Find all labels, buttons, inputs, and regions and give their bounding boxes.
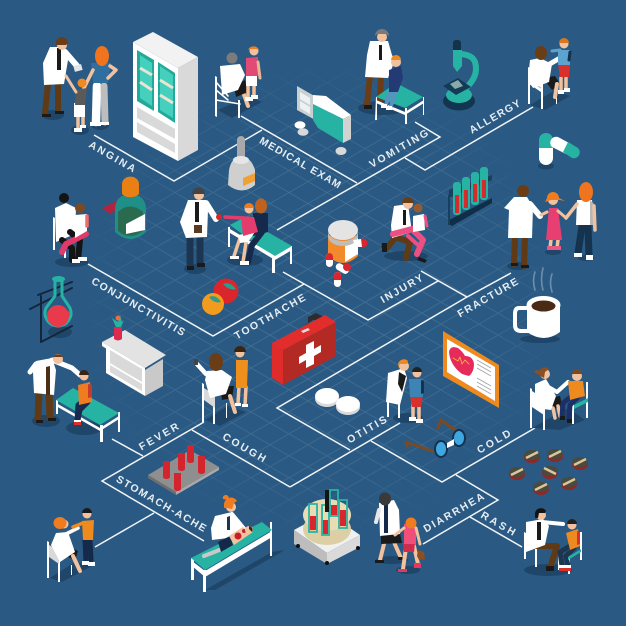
label: medical exam: MEDICAL EXAM xyxy=(257,135,343,191)
label: fever: FEVER xyxy=(137,421,181,453)
orange pill bottle with capsules xyxy=(326,220,368,287)
label: conjunctivitis: CONJUNCTIVITIS xyxy=(89,275,187,339)
tray with red tubes xyxy=(148,445,219,495)
people: stomach-ache nurse and patient on couch xyxy=(191,495,285,592)
capsules xyxy=(538,133,580,170)
people: injury doctor kneeling with girl xyxy=(382,197,428,263)
steam and coffee mug xyxy=(515,268,560,343)
first aid kit xyxy=(272,313,336,385)
people: cough woman on chair and girl xyxy=(194,346,250,426)
people: otitis doctor and child xyxy=(386,359,424,423)
label: injury: INJURY xyxy=(379,272,425,306)
rash plates xyxy=(509,449,588,495)
label: allergy: ALLERGY xyxy=(467,98,523,136)
white drawer cabinet with flowers xyxy=(102,315,166,396)
flowchart connector lines xyxy=(88,107,535,547)
label: toothache: TOOTHACHE xyxy=(232,292,308,342)
people: toothache doctor, mother and girl on bench xyxy=(180,188,292,274)
label: cold: COLD xyxy=(475,427,513,456)
tablets blister box xyxy=(294,86,351,155)
people: fracture doctor, girl and mother xyxy=(504,182,595,270)
lab flask on stand xyxy=(30,276,72,342)
test tubes in rack xyxy=(449,167,492,226)
label: diarrhea: DIARRHEA xyxy=(422,491,487,535)
people: cold woman and boy on chairs xyxy=(530,367,588,430)
people: stomach-ache nurse on chair and boy xyxy=(47,508,95,582)
people: conjunctivitis doctor holding girl xyxy=(53,193,89,267)
label: angina: ANGINA xyxy=(86,139,138,175)
people: medical exam doctor and girl xyxy=(215,46,262,118)
glasses xyxy=(406,420,465,457)
people: rash doctor and boy on chairs xyxy=(524,508,582,576)
green medicine bottle xyxy=(102,177,146,239)
microscope xyxy=(443,40,476,110)
label: stomach-ache: STOMACH-ACHE xyxy=(114,473,208,535)
people: fever doctor and boy on couch xyxy=(30,354,120,442)
heart poster xyxy=(443,331,499,408)
label: vomiting: VOMITING xyxy=(367,127,431,171)
apple and orange xyxy=(202,278,238,315)
label: fracture: FRACTURE xyxy=(456,276,520,320)
white tablets xyxy=(315,388,360,415)
label: otitis: OTITIS xyxy=(345,414,389,446)
label: cough: COUGH xyxy=(220,431,268,465)
medicine cabinet xyxy=(133,32,198,161)
people: diarrhea doctor and girl walking xyxy=(375,492,425,574)
test tubes on stand xyxy=(294,490,360,565)
label: rash: RASH xyxy=(479,509,517,539)
people: vomiting doctor and boy on couch xyxy=(358,29,424,124)
nasal drops bottle xyxy=(228,136,255,190)
people: angina doctor, woman and child xyxy=(42,37,116,135)
people: allergy woman on chair and child xyxy=(528,38,570,110)
